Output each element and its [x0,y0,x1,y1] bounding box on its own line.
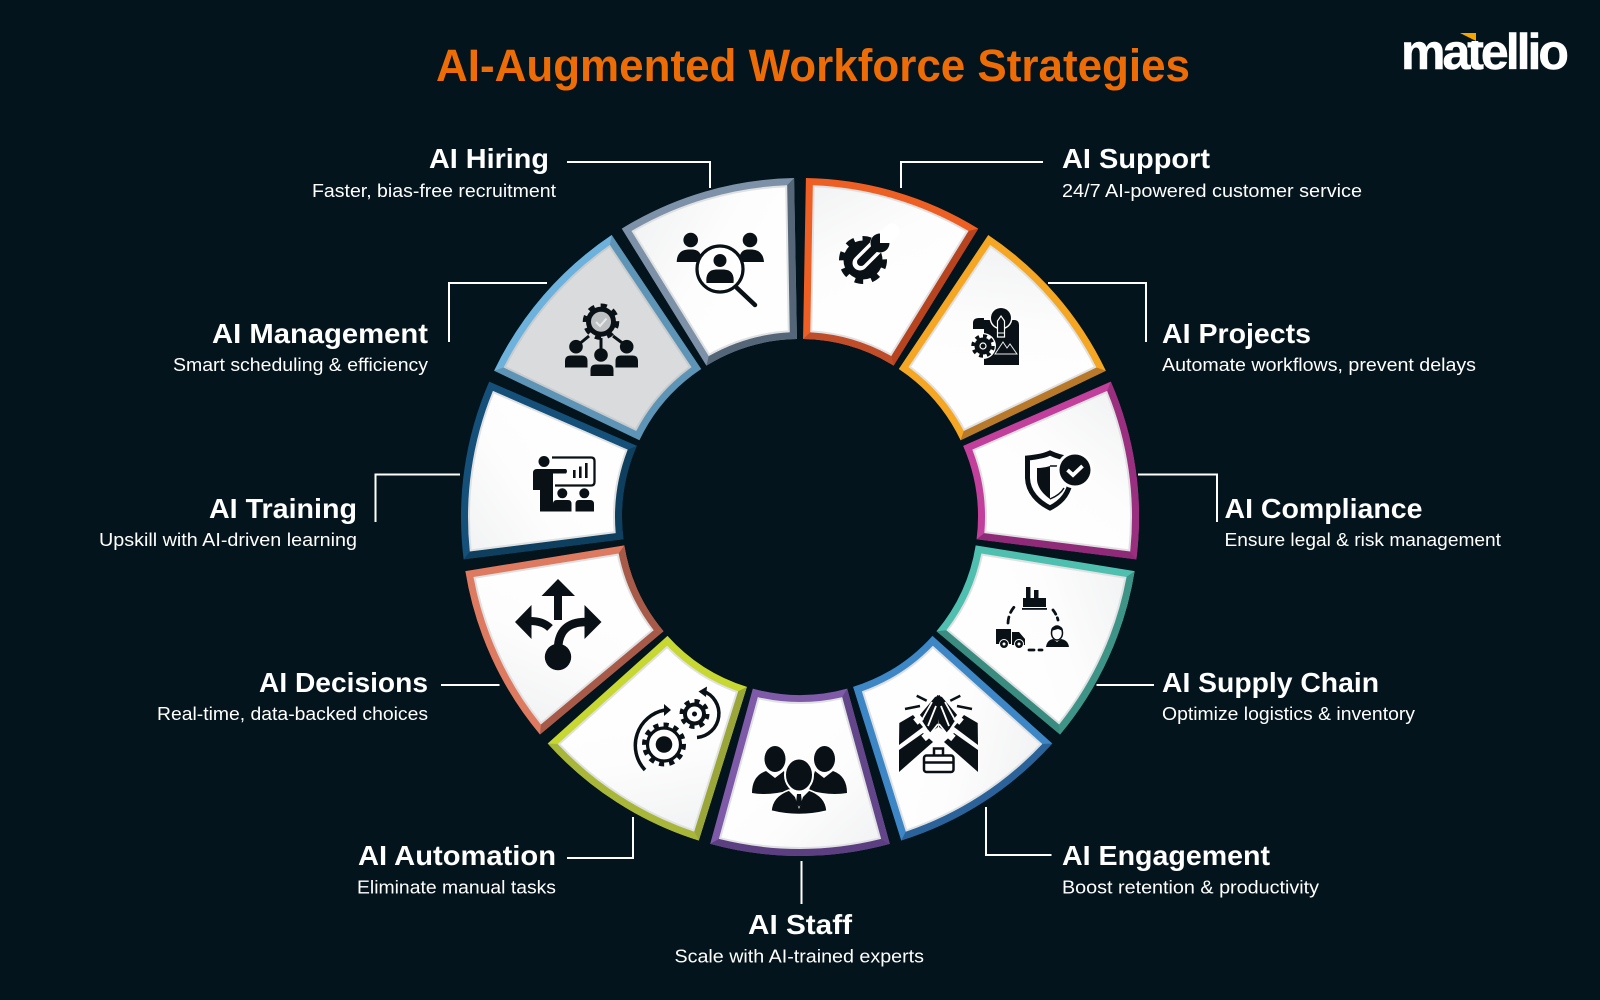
briefcase [924,748,954,772]
connector: AI Decisions [441,684,500,686]
label: AI Compliance: AI Compliance [1224,493,1422,524]
segment: AI Management [485,227,729,472]
label: AI Support: AI Support [1062,143,1210,174]
label: AI Training: AI Training [209,493,357,524]
label: AI Compliance: Ensure legal & risk management [1224,530,1501,550]
connector: AI Projects [1048,283,1146,342]
connector: AI Engagement [986,807,1052,855]
label: AI Projects [1162,318,1476,375]
icon: training presenter [533,456,594,512]
label: AI Staff [674,909,924,966]
connector: AI Staff [800,861,802,904]
connector: AI Supply Chain [1096,684,1154,686]
label: AI Staff: AI Staff [748,909,853,940]
segment: AI Hiring [618,166,838,378]
connector: AI Training [376,474,460,522]
label: AI Engagement: Boost retention & productivity [1062,878,1319,898]
right arm and hand [937,695,978,772]
segment: AI Support [762,166,982,378]
connector: AI Automation [567,817,633,858]
label: AI Supply Chain: AI Supply Chain [1162,667,1379,698]
label: AI Training [99,493,357,550]
segment: AI Engagement [817,613,1059,851]
label: AI Engagement [1062,840,1319,898]
label: AI Hiring: Faster, bias-free recruitment [312,181,556,201]
label: AI Decisions [157,667,428,724]
segment: AI Automation [541,613,783,851]
label: AI Engagement: AI Engagement [1062,840,1270,871]
segment: AI Decisions [454,507,681,740]
ring of eleven segments [452,166,1148,856]
connector: AI Compliance [1138,474,1217,522]
connector: AI Support [901,162,1043,188]
icon: management network [565,306,638,376]
icon: high five with briefcase [899,695,978,772]
icon: project document with bulb [970,306,1019,365]
icon: hiring magnifier [677,233,764,305]
segment: AI Supply Chain [919,507,1146,740]
label: AI Staff: Scale with AI-trained experts [674,946,924,966]
label: AI Support: 24/7 AI-powered customer service [1062,181,1362,201]
icon: gear and wrench [842,230,894,282]
segment: AI Projects [871,227,1115,472]
label: AI Supply Chain [1162,667,1415,724]
label: AI Automation [357,840,556,898]
connector: AI Management [449,283,547,342]
label: AI Decisions: AI Decisions [259,667,428,698]
label: AI Management [173,318,428,375]
label: AI Training: Upskill with AI-driven learning [99,530,357,550]
segment: AI Staff [710,689,890,856]
icon: decision arrows [515,579,602,670]
label: AI Management: Smart scheduling & efficiency [173,355,428,375]
label: AI Hiring: AI Hiring [429,143,549,174]
icon: automation gears [635,686,719,770]
label: AI Projects: Automate workflows, prevent delays [1162,355,1476,375]
left arm and hand [899,695,940,772]
icon: supply chain loop [996,587,1069,650]
label: AI Automation: Eliminate manual tasks [357,878,556,898]
logo: matellio: matellio [1401,24,1567,80]
icon: shield with check [1028,452,1094,508]
label: AI Hiring [312,143,556,201]
label: AI Decisions: Real-time, data-backed choices [157,704,428,724]
segment: AI Compliance [957,380,1148,581]
label: AI Compliance [1224,493,1501,550]
connector: AI Hiring [567,162,710,188]
icon: three staff busts [752,746,847,814]
label: AI Automation: AI Automation [358,840,556,871]
label: AI Support [1062,143,1362,201]
title: AI-Augmented Workforce Strategies [436,40,1190,91]
label: AI Supply Chain: Optimize logistics & inventory [1162,704,1415,724]
label: AI Management: AI Management [212,318,428,349]
segment: AI Training [452,380,643,581]
label: AI Projects: AI Projects [1162,318,1311,349]
